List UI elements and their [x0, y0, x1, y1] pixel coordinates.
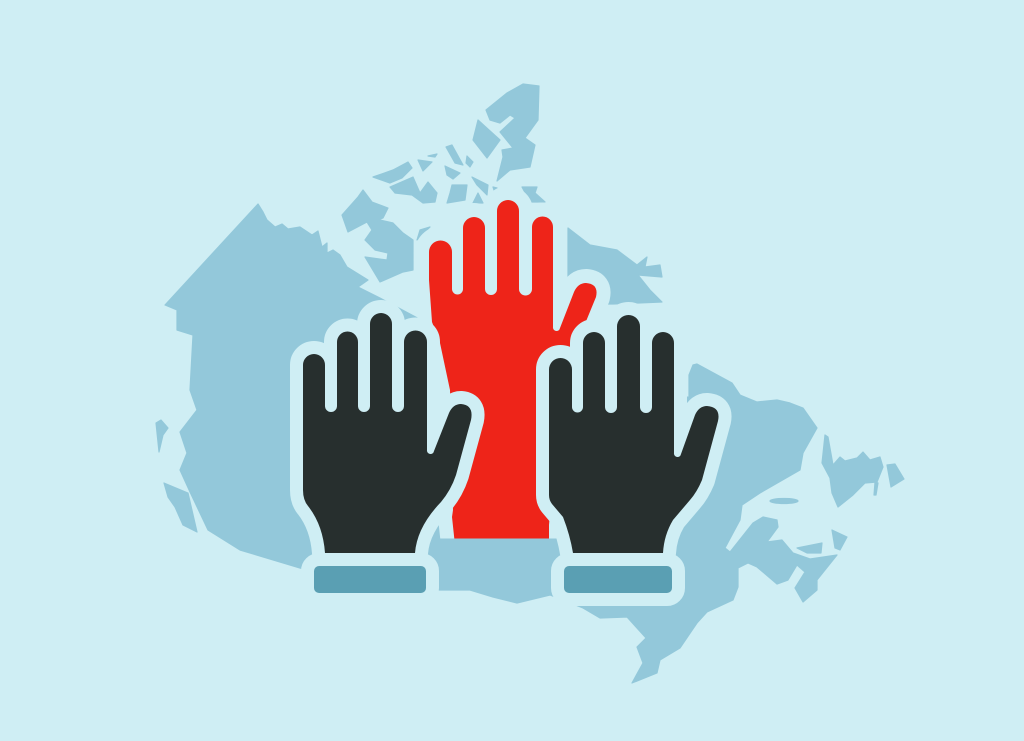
illustration: raised hands over map of Canada: [155, 83, 904, 684]
right wrist cuff: [564, 566, 672, 593]
map: Axel Heiberg island: [473, 120, 500, 158]
icon: left dark hand: [303, 313, 472, 593]
map: small eastern islands: [797, 464, 904, 553]
map: Victoria island: [342, 190, 413, 282]
icon: right dark hand: [549, 315, 719, 593]
map: small Arctic islands: [373, 145, 545, 240]
map: north-east coast patch: [568, 228, 662, 304]
map of Canada: [156, 84, 904, 683]
map: western mainland and south: [165, 204, 837, 683]
map: west coast islands: [156, 420, 197, 532]
map: Ellesmere island: [486, 84, 539, 181]
left wrist cuff: [314, 566, 426, 593]
icon: red raised hand: [429, 200, 597, 545]
map: Newfoundland: [822, 435, 883, 507]
map: Anticosti island: [770, 498, 798, 504]
